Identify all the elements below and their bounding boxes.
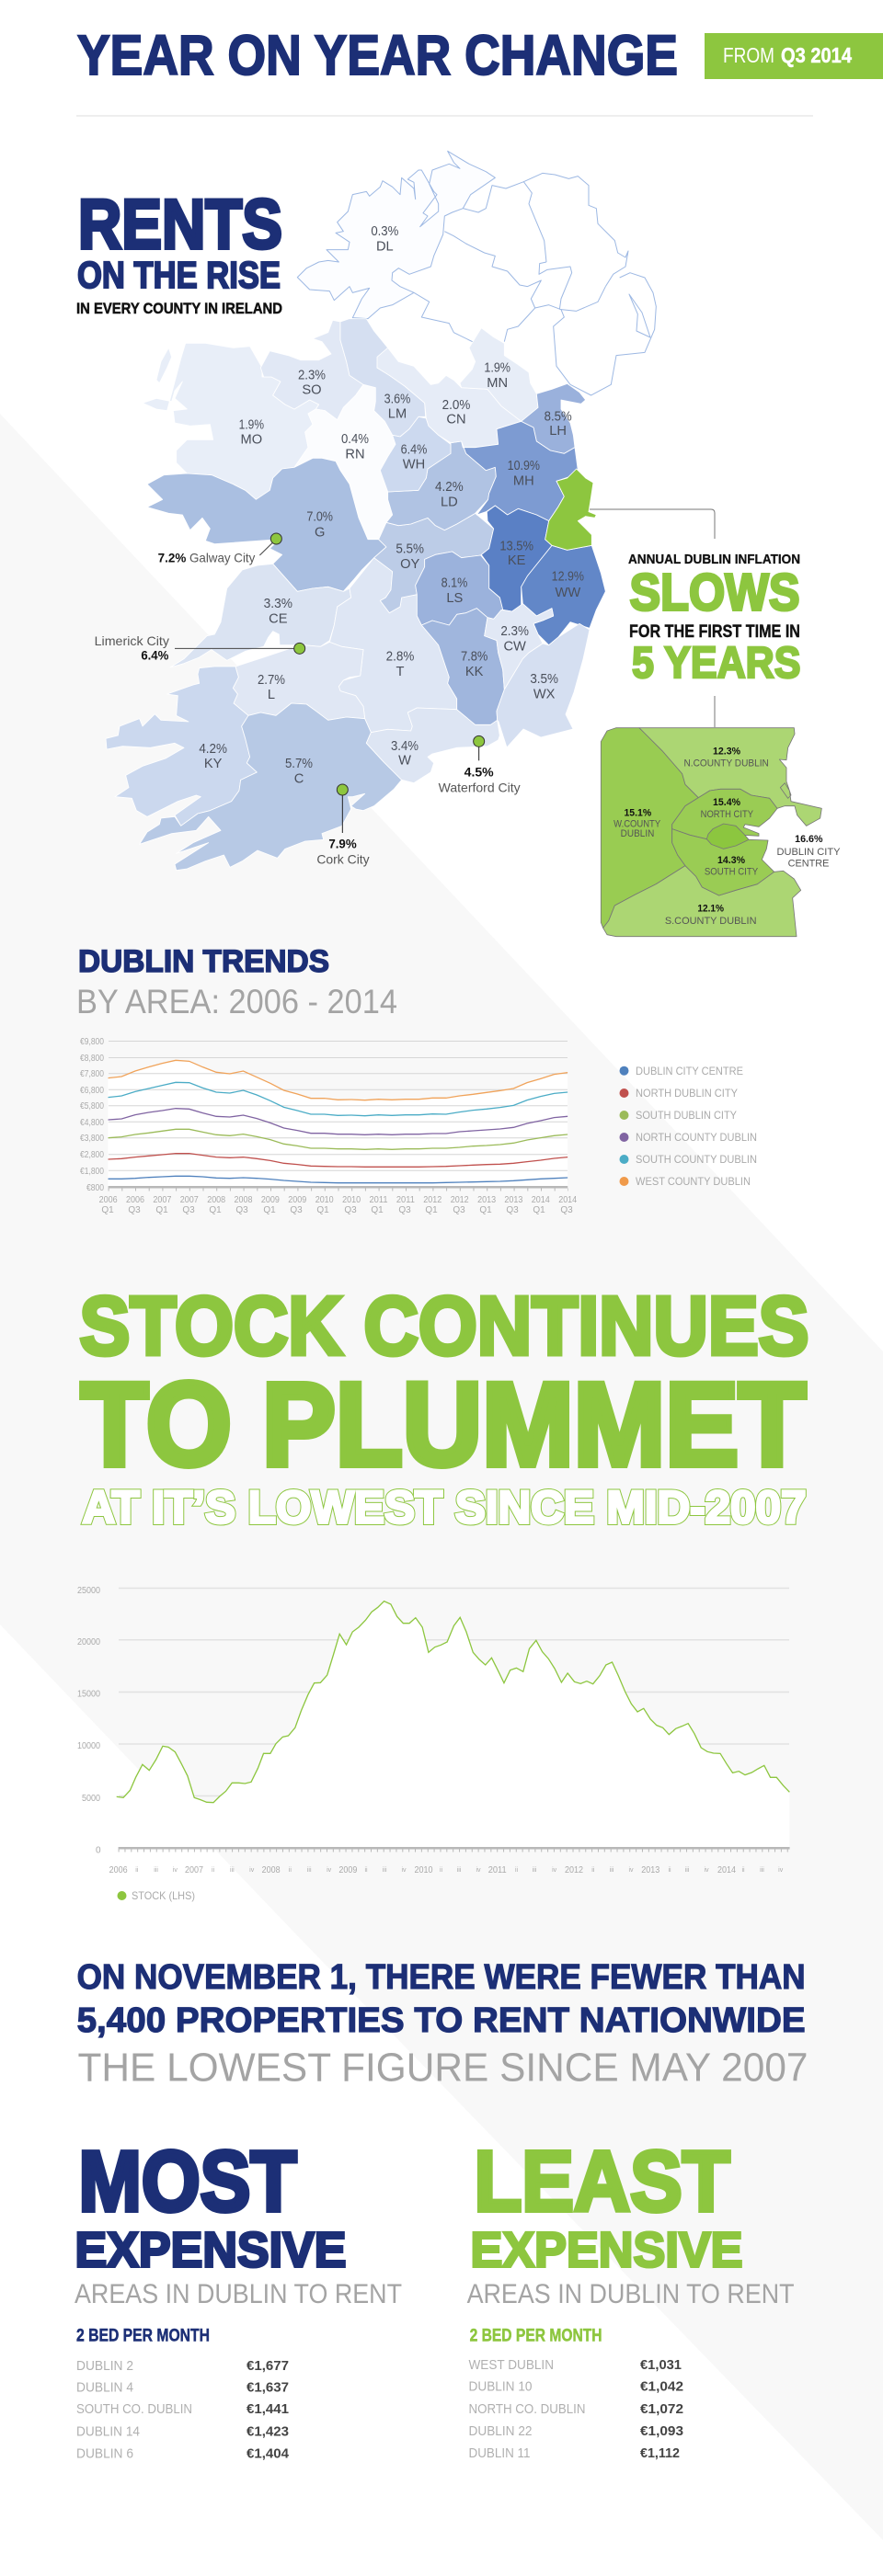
x axis labels: 2006: [126, 1195, 144, 1205]
county labels: CN: [446, 413, 466, 427]
y axis labels: €4,800: [80, 1118, 104, 1128]
y axis labels: 10000: [77, 1741, 100, 1751]
x axis labels: 2014: [558, 1195, 578, 1205]
x axis labels: iii: [307, 1867, 312, 1874]
county labels: CE: [269, 611, 288, 626]
county labels: 10.9%: [508, 459, 540, 473]
Dublin area labels: DUBLIN CITY: [776, 847, 841, 858]
table: most expensive rents: €1,423: [247, 2423, 289, 2440]
Dublin area labels: 15.4%: [713, 797, 740, 808]
badge: from Q3 2014: [705, 33, 883, 79]
city pin: Limerick: Limerick City: [95, 633, 169, 648]
Dublin area labels: 14.3%: [717, 855, 745, 866]
area: West County Dublin: [601, 728, 698, 928]
x axis labels: 2007: [153, 1195, 172, 1205]
x axis labels: Q1: [425, 1205, 438, 1215]
county labels: RN: [345, 448, 365, 462]
county labels: 8.5%: [545, 409, 572, 424]
series: north county Dublin: [109, 1109, 568, 1134]
x axis labels: 2010: [414, 1865, 433, 1875]
x axis labels: 2011: [488, 1865, 507, 1875]
x axis labels: iii: [383, 1867, 387, 1874]
x axis labels: ii: [135, 1867, 139, 1874]
x axis labels: 2010: [342, 1195, 361, 1205]
y axis labels: 20000: [77, 1637, 100, 1647]
county labels: 1.9%: [484, 361, 510, 376]
y axis labels: €5,800: [80, 1101, 104, 1111]
area: South City: [672, 829, 774, 895]
county labels: 3.4%: [391, 739, 419, 754]
heading: least expensive: 2 BED PER MONTH: [470, 2326, 602, 2346]
x axis labels: Q3: [506, 1205, 519, 1215]
y axis labels: 5000: [82, 1794, 100, 1804]
city pin: Galway: 7.2%: [158, 551, 187, 565]
table: most expensive rents: DUBLIN 14: [76, 2423, 140, 2440]
city pin: Cork: [316, 784, 370, 866]
callout: Dublin inflation slows: FOR THE FIRST TIME IN: [629, 622, 800, 642]
x axis labels: Q1: [479, 1205, 492, 1215]
county labels: 13.5%: [499, 539, 533, 553]
map: Dublin areas: [601, 728, 841, 937]
county: Offaly: [374, 513, 494, 613]
table: most expensive rents: €1,637: [247, 2380, 289, 2396]
text block: fewer than 5,400 properties: [77, 1958, 808, 2091]
legend: Dublin areas: SOUTH COUNTY DUBLIN: [636, 1153, 757, 1166]
county labels: 6.4%: [401, 442, 427, 457]
label: Donegal: DL: [376, 240, 394, 255]
heading: Dublin trends: BY AREA: 2006 - 2014: [76, 983, 397, 1020]
x axis labels: ii: [515, 1867, 518, 1874]
table: least expensive rents: DUBLIN 10: [469, 2379, 532, 2395]
county labels: 3.6%: [384, 392, 410, 406]
series: Dublin city centre: [109, 1176, 568, 1183]
city pin: Limerick: [95, 633, 305, 663]
series: south county Dublin: [109, 1082, 568, 1116]
x axis labels: ii: [741, 1867, 745, 1874]
label: Donegal: [371, 224, 398, 255]
county labels: 2.0%: [442, 398, 470, 413]
area: South County Dublin: [603, 866, 801, 937]
city pin: Waterford: Waterford City: [439, 781, 521, 795]
map: northern ireland and donegal: [297, 151, 656, 395]
series: south Dublin city: [109, 1129, 568, 1149]
x axis labels: 2009: [288, 1195, 307, 1205]
x axis labels: 2008: [234, 1195, 253, 1205]
county labels: 4.2%: [199, 742, 227, 757]
x axis labels: ii: [591, 1867, 595, 1874]
city pin: Cork: 7.9%: [328, 837, 357, 851]
table: least expensive rents: €1,112: [640, 2445, 680, 2461]
y axis labels: 15000: [77, 1690, 100, 1699]
connector arrow: Dublin to callout: [590, 509, 715, 539]
county labels: 7.8%: [461, 649, 487, 664]
table: most expensive rents: €1,441: [247, 2401, 289, 2417]
county labels: 2.8%: [386, 649, 414, 664]
x axis labels: iv: [704, 1867, 709, 1874]
county: Dublin: [545, 469, 596, 550]
county labels: G: [315, 525, 325, 540]
county labels: KK: [465, 665, 484, 679]
county labels: LD: [441, 495, 458, 509]
table: most expensive rents: [76, 2358, 290, 2462]
callout: Dublin inflation slows: ANNUAL DUBLIN INFLATION: [628, 552, 800, 567]
x axis labels: Q1: [371, 1205, 384, 1215]
x axis labels: iii: [457, 1867, 462, 1874]
Dublin area labels: SOUTH CITY: [705, 866, 759, 877]
x axis labels: 2013: [641, 1865, 660, 1875]
x axis labels: Q3: [344, 1205, 357, 1215]
x axis labels: ii: [668, 1867, 671, 1874]
text block: fewer than 5,400 properties: THE LOWEST FIGURE SINCE MAY 2007: [77, 2045, 808, 2091]
table: least expensive rents: DUBLIN 11: [469, 2445, 530, 2461]
x axis labels: ii: [440, 1867, 442, 1874]
county labels: C: [294, 772, 304, 787]
county labels: [199, 361, 584, 787]
x axis labels: 2009: [338, 1865, 358, 1875]
legend: Dublin areas: [620, 1065, 757, 1188]
table: least expensive rents: €1,093: [640, 2423, 683, 2439]
x axis labels: 2007: [180, 1195, 199, 1205]
county: Limerick: [233, 642, 365, 720]
county: Longford: [386, 441, 496, 530]
y axis labels: €7,800: [80, 1069, 104, 1079]
text block: fewer than 5,400 properties: ON NOVEMBER 1, THERE WERE FEWER THAN: [77, 1958, 806, 1997]
Dublin area labels: 16.6%: [795, 834, 822, 845]
city pin: Galway: Galway City: [189, 551, 255, 565]
x axis labels: Q1: [263, 1205, 276, 1215]
county: Clare: [170, 564, 351, 667]
legend: Dublin areas: DUBLIN CITY CENTRE: [636, 1065, 743, 1077]
heading: most expensive: [75, 2133, 402, 2346]
heading: least expensive: LEAST: [475, 2133, 730, 2228]
heading: least expensive: EXPENSIVE: [471, 2223, 743, 2278]
legend: Dublin areas: WEST COUNTY DUBLIN: [636, 1175, 751, 1188]
table: least expensive rents: DUBLIN 22: [469, 2423, 532, 2439]
area: North County Dublin: [639, 728, 821, 826]
x axis labels: Q3: [453, 1205, 465, 1215]
y axis labels: 0: [96, 1846, 101, 1855]
x axis labels: 2013: [504, 1195, 523, 1205]
x axis labels: iii: [685, 1867, 690, 1874]
text block: fewer than 5,400 properties: 5,400 PROPERTIES TO RENT NATIONWIDE: [77, 2001, 806, 2040]
county labels: T: [396, 665, 405, 679]
table: least expensive rents: €1,042: [640, 2379, 683, 2395]
city pin: Galway: [158, 533, 281, 565]
city pin: Waterford: [439, 735, 521, 795]
table: most expensive rents: SOUTH CO. DUBLIN: [76, 2401, 192, 2417]
city pin: Limerick: 6.4%: [141, 648, 169, 663]
table: least expensive rents: €1,072: [640, 2401, 683, 2417]
county labels: WW: [555, 586, 580, 600]
county: Louth: [522, 383, 586, 453]
chart plot area: [109, 1060, 568, 1187]
Dublin area labels: S.COUNTY DUBLIN: [665, 916, 756, 927]
x axis labels: ii: [212, 1867, 214, 1874]
x axis labels: 2011: [396, 1195, 415, 1205]
x axis labels: iii: [760, 1867, 764, 1874]
city pin: Waterford: 4.5%: [464, 765, 494, 780]
county labels: MH: [513, 473, 534, 488]
x axis labels: ii: [289, 1867, 292, 1874]
county labels: 5.7%: [285, 757, 313, 771]
county: Mayo: [143, 343, 319, 499]
county labels: CW: [503, 640, 526, 655]
county labels: LH: [549, 424, 567, 439]
county: Donegal: [297, 151, 495, 319]
county labels: 8.1%: [442, 576, 467, 590]
Dublin area labels: W.COUNTY: [614, 818, 661, 829]
line chart: Dublin rents by area: [80, 1037, 578, 1215]
county labels: 0.4%: [341, 432, 369, 447]
x axis labels: Q1: [533, 1205, 545, 1215]
heading: stock continues to plummet: [79, 1281, 809, 1533]
heading: most expensive: 2 BED PER MONTH: [76, 2326, 210, 2346]
heading: rents on the rise: RENTS: [78, 186, 282, 264]
x axis labels: 2014: [532, 1195, 550, 1205]
heading: least expensive: AREAS IN DUBLIN TO RENT: [467, 2279, 795, 2309]
x axis labels: 2008: [262, 1865, 281, 1875]
county: Galway: [147, 458, 386, 591]
county labels: KY: [204, 757, 223, 771]
county: Kildare: [481, 506, 552, 611]
county labels: WX: [533, 687, 556, 701]
heading: stock continues to plummet: AT IT’S LOWEST SINCE MID-2007: [83, 1482, 806, 1533]
county labels: SO: [302, 383, 322, 398]
x axis labels: 2011: [370, 1195, 388, 1205]
x axis labels: 2007: [185, 1865, 203, 1875]
table: most expensive rents: €1,677: [247, 2358, 289, 2374]
heading: stock continues to plummet: AT IT’S LOWEST SINCE MID-2007: [83, 1482, 806, 1533]
county: Westmeath: [380, 416, 451, 492]
legend: Dublin areas: NORTH COUNTY DUBLIN: [636, 1131, 757, 1144]
x axis labels: Q3: [398, 1205, 411, 1215]
county labels: MO: [241, 433, 262, 448]
county labels: 1.9%: [239, 418, 264, 433]
county labels: 2.7%: [258, 673, 285, 688]
table: least expensive rents: [469, 2357, 683, 2461]
county: Meath: [462, 421, 578, 521]
x axis labels: [109, 1865, 784, 1875]
county labels: KE: [508, 553, 526, 568]
county: Sligo: [260, 320, 363, 420]
Dublin area labels: DUBLIN: [621, 828, 654, 839]
county labels: OY: [400, 557, 419, 572]
county labels: 3.3%: [264, 597, 292, 611]
heading: rents on the rise: IN EVERY COUNTY IN IRELAND: [76, 300, 282, 317]
Dublin area labels: NORTH CITY: [701, 809, 753, 820]
county: Kerry: [106, 667, 257, 826]
panel: most expensive areas: [75, 2133, 402, 2462]
heading: most expensive: EXPENSIVE: [75, 2223, 346, 2278]
stock area and line: [117, 1601, 789, 1848]
y axis labels: €2,800: [80, 1150, 104, 1160]
county: Monaghan: [460, 328, 538, 421]
county: Tipperary: [329, 558, 457, 733]
y axis labels: €800: [86, 1183, 104, 1193]
Dublin area labels: 12.1%: [697, 903, 724, 914]
heading: Dublin trends: DUBLIN TRENDS: [78, 944, 329, 979]
x axis labels: 2012: [423, 1195, 442, 1205]
Dublin area labels: CENTRE: [788, 859, 830, 870]
county: Roscommon: [294, 384, 396, 540]
Dublin area labels: [614, 747, 841, 927]
county: Cavan: [377, 348, 522, 448]
table: least expensive rents: WEST DUBLIN: [469, 2357, 554, 2373]
Dublin area labels: 15.1%: [624, 808, 651, 819]
x axis labels: Q3: [290, 1205, 303, 1215]
y axis labels: 25000: [77, 1586, 100, 1596]
x axis labels: Q1: [101, 1205, 114, 1215]
x axis labels: 2013: [477, 1195, 496, 1205]
x axis labels: ii: [364, 1867, 368, 1874]
county labels: MN: [487, 376, 508, 391]
callout: Dublin inflation slows: SLOWS: [629, 563, 800, 621]
y axis labels: €6,800: [80, 1086, 104, 1096]
x axis labels: 2010: [315, 1195, 334, 1205]
x axis labels: Q1: [316, 1205, 329, 1215]
x axis labels: Q1: [209, 1205, 222, 1215]
x axis labels: [99, 1195, 578, 1215]
heading: stock continues to plummet: TO PLUMMET: [81, 1359, 806, 1491]
x axis labels: 2012: [565, 1865, 583, 1875]
x axis labels: iv: [249, 1867, 255, 1874]
title: YEAR ON YEAR CHANGE: [77, 24, 678, 86]
y axis labels: [80, 1037, 104, 1193]
label: Donegal: 0.3%: [371, 224, 398, 239]
x axis labels: iii: [610, 1867, 614, 1874]
county: Wicklow: [522, 545, 605, 645]
table: least expensive rents: €1,031: [640, 2357, 682, 2373]
county: Wexford: [497, 623, 590, 747]
county: Carlow: [485, 604, 554, 690]
series: north Dublin city: [109, 1154, 568, 1167]
callout: Dublin inflation slows: 5 YEARS: [632, 639, 800, 688]
county labels: 2.3%: [500, 624, 529, 639]
county: Waterford: [366, 708, 499, 783]
y axis labels: €8,800: [80, 1054, 104, 1064]
county labels: 2.3%: [298, 368, 326, 382]
county labels: 7.0%: [306, 510, 333, 525]
table: most expensive rents: €1,404: [247, 2446, 290, 2462]
county labels: 4.2%: [435, 480, 464, 495]
county labels: LS: [446, 591, 464, 606]
northern ireland county outlines: [414, 173, 656, 395]
city pin: Cork: Cork City: [316, 851, 370, 866]
county labels: WH: [403, 458, 425, 473]
x axis labels: 2008: [207, 1195, 226, 1205]
heading: most expensive: MOST: [79, 2133, 296, 2228]
heading: rents on the rise: ON THE RISE: [77, 254, 281, 296]
panel: least expensive areas: [467, 2133, 795, 2461]
heading: most expensive: AREAS IN DUBLIN TO RENT: [75, 2279, 402, 2309]
area: Dublin City Centre: [706, 824, 749, 849]
x axis labels: iv: [173, 1867, 178, 1874]
series lines: [109, 1060, 568, 1183]
county: Kilkenny: [421, 609, 504, 724]
map: republic of ireland counties: [95, 319, 605, 871]
badge: from Q3 2014: FROM: [723, 43, 774, 67]
legend: Dublin areas: SOUTH DUBLIN CITY: [636, 1109, 737, 1122]
x axis labels: iv: [476, 1867, 481, 1874]
x axis labels: Q3: [235, 1205, 248, 1215]
y axis labels: [77, 1586, 101, 1855]
x axis labels: Q3: [182, 1205, 195, 1215]
x axis labels: iv: [327, 1867, 332, 1874]
table: most expensive rents: DUBLIN 2: [76, 2358, 133, 2374]
series: west county Dublin: [109, 1060, 568, 1100]
x axis labels: Q1: [155, 1205, 168, 1215]
y axis labels: €9,800: [80, 1037, 104, 1047]
y axis labels: €1,800: [80, 1167, 104, 1177]
connector: callout to Dublin map: [714, 696, 716, 727]
heading: rents on the rise: [76, 186, 282, 317]
county: Laois: [416, 552, 503, 625]
heading: stock continues to plummet: STOCK CONTINUES: [79, 1281, 809, 1373]
x axis labels: iv: [628, 1867, 634, 1874]
heading: Dublin trends: [76, 944, 397, 1020]
table: most expensive rents: DUBLIN 6: [76, 2446, 133, 2462]
Dublin area labels: 12.3%: [713, 747, 740, 758]
heading: least expensive: [467, 2133, 795, 2346]
x axis labels: 2009: [261, 1195, 280, 1205]
county: Cork: [140, 703, 402, 871]
area chart: rental stock: [77, 1586, 790, 1902]
x axis labels: 2006: [109, 1865, 128, 1875]
x axis labels: iv: [552, 1867, 557, 1874]
southern counties: [106, 604, 590, 871]
legend: Dublin areas: NORTH DUBLIN CITY: [636, 1087, 738, 1100]
x axis labels: iii: [533, 1867, 537, 1874]
county labels: 12.9%: [552, 570, 584, 585]
legend: stock: STOCK (LHS): [132, 1889, 195, 1902]
callout: Dublin inflation slows: [628, 552, 800, 688]
county labels: LM: [388, 407, 407, 422]
x axis labels: iii: [154, 1867, 158, 1874]
county labels: L: [268, 688, 275, 702]
x axis labels: 2012: [451, 1195, 469, 1205]
county labels: 3.5%: [530, 672, 558, 687]
x axis labels: iii: [230, 1867, 235, 1874]
x axis labels: Q3: [560, 1205, 573, 1215]
county labels: 5.5%: [396, 542, 424, 557]
county: Leitrim: [340, 319, 426, 437]
y axis labels: €3,800: [80, 1134, 104, 1144]
x axis labels: 2014: [717, 1865, 736, 1875]
x axis labels: iv: [778, 1867, 784, 1874]
county labels: W: [398, 754, 411, 769]
x axis labels: iv: [401, 1867, 407, 1874]
table: most expensive rents: DUBLIN 4: [76, 2380, 133, 2396]
badge: from Q3 2014: Q3 2014: [781, 43, 852, 67]
area: North City: [672, 789, 777, 839]
Dublin area labels: N.COUNTY DUBLIN: [683, 758, 769, 769]
table: least expensive rents: NORTH CO. DUBLIN: [469, 2401, 585, 2417]
x axis labels: 2006: [99, 1195, 118, 1205]
x axis labels: Q3: [128, 1205, 141, 1215]
